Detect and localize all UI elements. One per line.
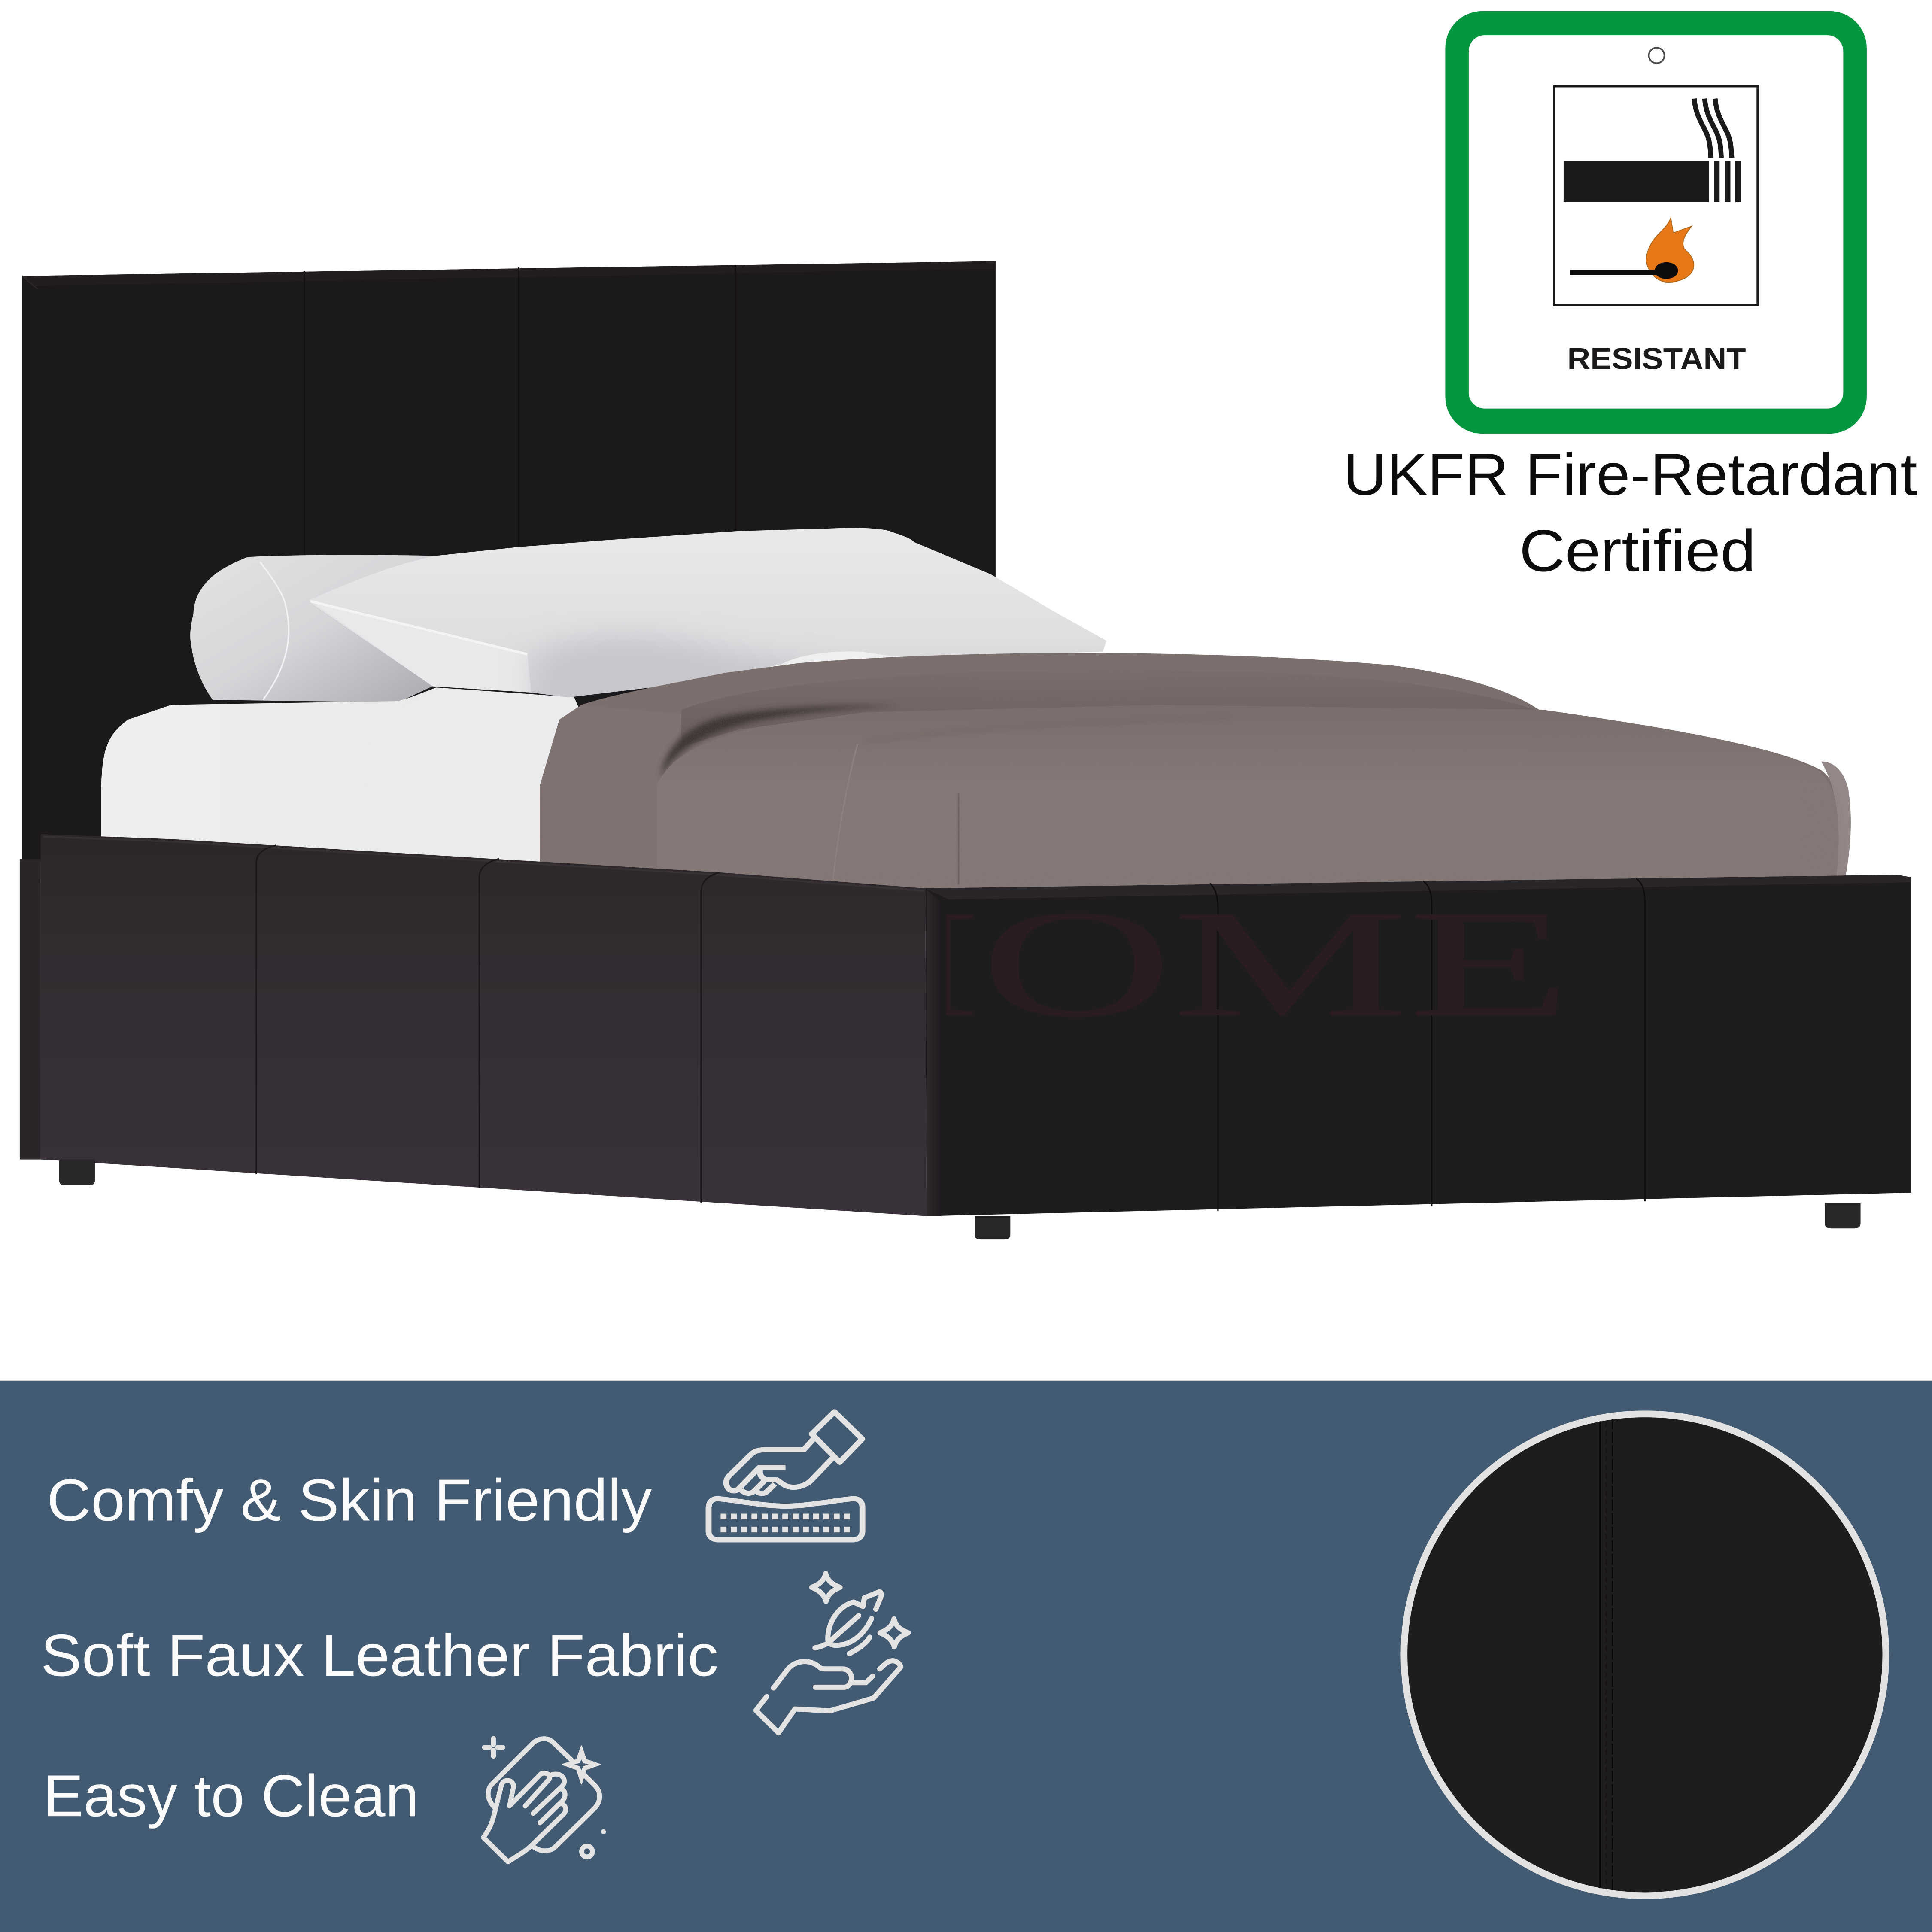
leather detail swatch (1404, 1405, 1886, 1910)
certification caption: UKFR Fire-Retardant (1343, 441, 1917, 507)
feature text: comfy: Comfy & Skin Friendly (47, 1467, 652, 1533)
blanket fabric grain (672, 710, 820, 756)
feature text: easy to clean: Easy to Clean (43, 1763, 419, 1829)
fire resistant badge (1445, 11, 1867, 434)
blanket (530, 647, 1861, 905)
stitched seam (1600, 1405, 1613, 1910)
foot end panel (925, 875, 1911, 1216)
side rail (41, 834, 927, 1216)
icon: hand pressing mattress (708, 1412, 863, 1540)
feature text: soft faux leather: Soft Faux Leather Fabric (41, 1622, 718, 1689)
headboard (20, 261, 996, 1160)
pillow (309, 528, 1106, 697)
bed legs (59, 1160, 1861, 1239)
icon: feather over hand (756, 1574, 908, 1733)
certification caption: Certified (1519, 518, 1756, 584)
cigarette and match symbol (1554, 86, 1758, 305)
resistant label: RESISTANT (1567, 342, 1746, 376)
mattress sheet (101, 687, 579, 893)
panel: features band (0, 1381, 1932, 1932)
bolster cushion (190, 555, 436, 702)
bed product illustration (20, 261, 1911, 1239)
icon: hand wiping with cloth (483, 1738, 605, 1862)
certification caption (1343, 441, 1917, 584)
faint watermark: HOME (789, 878, 1571, 1049)
